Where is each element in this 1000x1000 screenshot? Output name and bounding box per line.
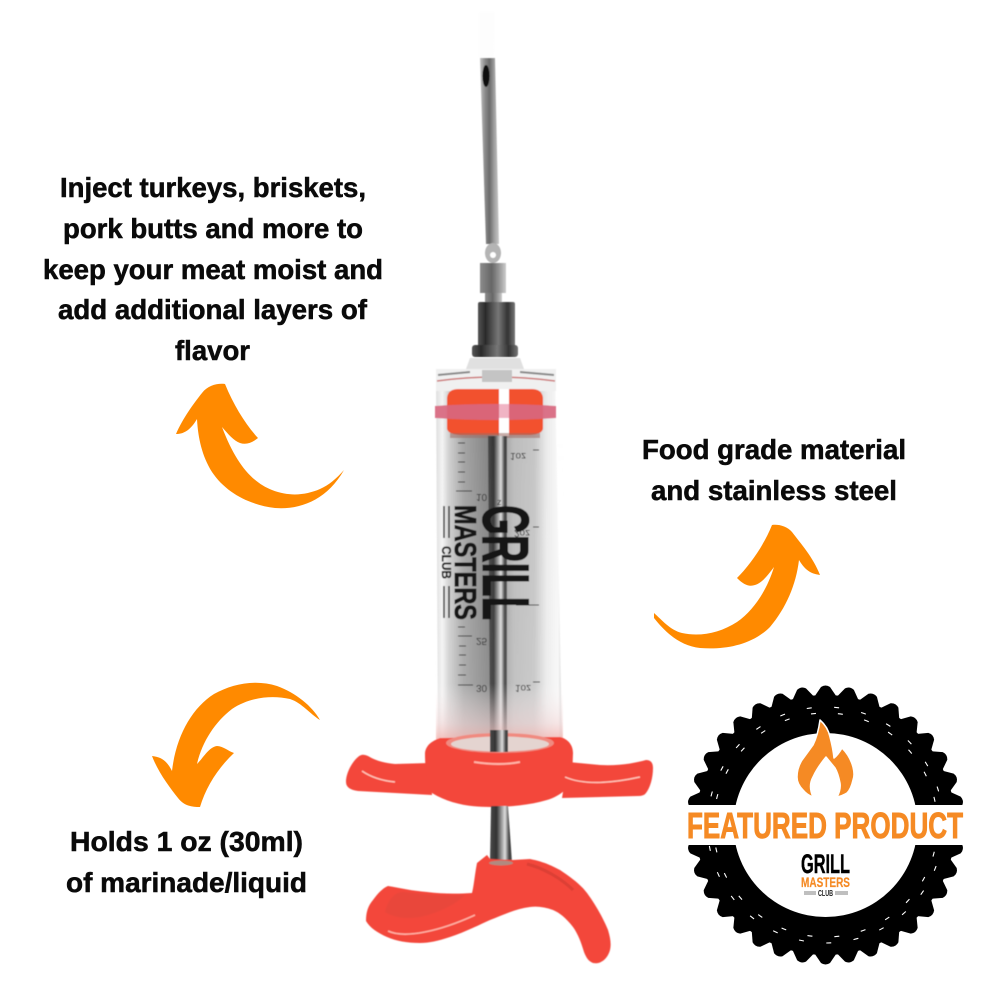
right tick marks and scale labels [476, 450, 540, 693]
thumb press [366, 855, 611, 963]
knurled ring [472, 345, 518, 357]
right tick marks and scale labels: 1oz [510, 450, 526, 461]
printed logo: GRILL: GRILL [469, 505, 543, 620]
right tick marks and scale labels: 25 [476, 635, 488, 646]
left tick marks [456, 443, 473, 685]
badge logo: CLUB [818, 889, 833, 898]
finger flange right wing [562, 760, 653, 798]
plunger head [435, 389, 556, 438]
text: injection benefits: flavor [175, 335, 250, 366]
text: injection benefits: pork butts and more to [63, 213, 363, 244]
text: injection benefits [43, 172, 383, 366]
featured product badge [680, 686, 972, 964]
badge logo: MASTERS [801, 874, 850, 890]
arrow: up-right toward material text [654, 525, 820, 648]
flange ring [362, 730, 640, 807]
text: capacity: of marinade/liquid [66, 867, 307, 898]
right tick marks and scale labels: 2oz [514, 527, 530, 538]
arrow: down-left toward capacity text [152, 683, 320, 807]
text: capacity [66, 826, 307, 898]
right tick marks and scale labels: 10 [476, 491, 488, 502]
plunger rod [488, 436, 507, 745]
flame icon [797, 720, 854, 797]
right tick marks and scale labels: 1oz [515, 682, 531, 693]
barrel [435, 369, 563, 745]
finger flange left wing [346, 755, 432, 795]
text: injection benefits: Inject turkeys, briskets, [60, 172, 366, 203]
text: food grade material: and stainless steel [651, 475, 897, 506]
hex fitting [480, 263, 506, 293]
collar [478, 302, 515, 347]
badge serrated ring [686, 686, 965, 964]
barrel top cap [466, 358, 524, 369]
printed logo: MASTERS: MASTERS [448, 505, 483, 620]
text: injection benefits: add additional layers of [58, 294, 368, 325]
needle [480, 58, 501, 263]
lower plunger rod [490, 806, 512, 862]
syringe injector [346, 12, 653, 963]
printed logo: CLUB: CLUB [439, 546, 454, 579]
arrow: up-left toward injection text [176, 384, 344, 508]
badge logo [801, 849, 850, 898]
text: capacity: Holds 1 oz (30ml) [70, 826, 303, 857]
text: food grade material [642, 434, 906, 506]
badge logo: GRILL [801, 849, 850, 879]
text: injection benefits: keep your meat moist and [43, 254, 383, 285]
small mark: z [497, 497, 502, 507]
text: food grade material: Food grade material [642, 434, 906, 465]
needle tip ghost [479, 12, 495, 58]
right tick marks and scale labels: 30 [476, 682, 488, 693]
white band [680, 805, 972, 845]
